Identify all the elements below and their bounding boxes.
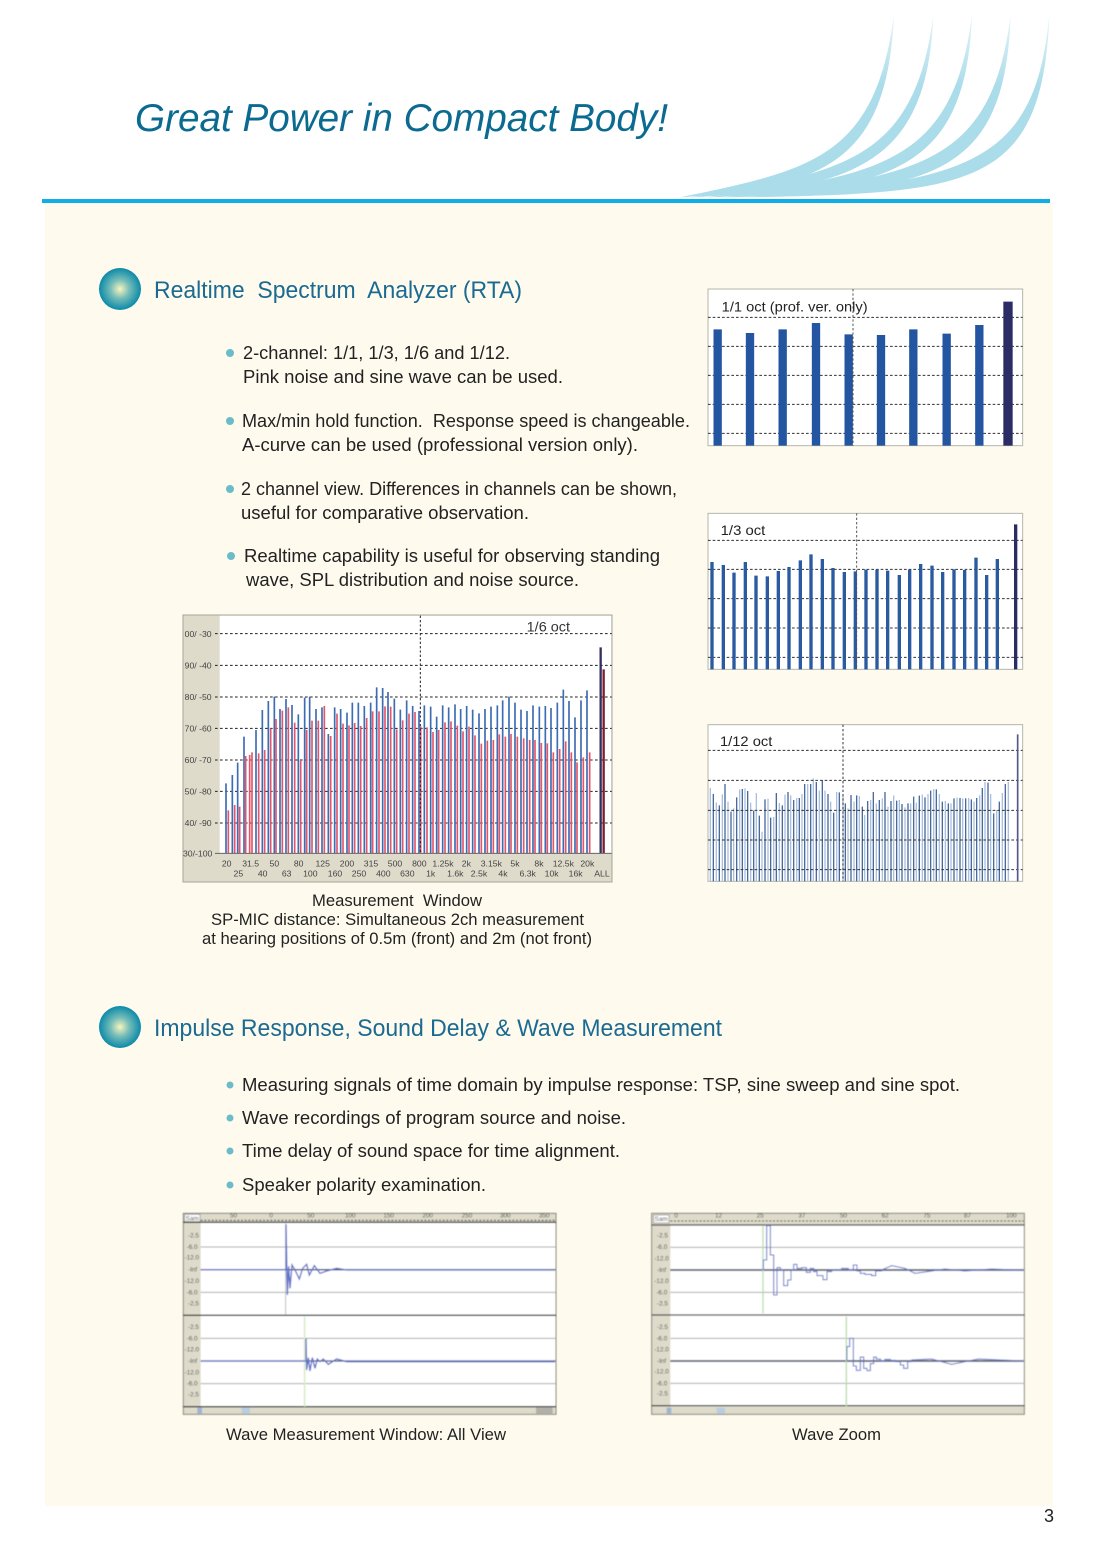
red channel bars — [228, 706, 590, 853]
wave axis labels: -6.0 — [187, 1335, 198, 1342]
x axis labels: 31.5 — [242, 859, 259, 869]
y axis labels: 30/-100 — [183, 849, 213, 859]
wave zoom axis labels: -6.0 — [656, 1380, 668, 1387]
bullet list: RTA features: Pink noise and sine wave can be used. — [243, 366, 563, 387]
x axis labels: 6.3k — [519, 869, 537, 879]
chart: 1/12 octave — [708, 725, 1023, 881]
wave axis labels: 200 — [422, 1213, 433, 1220]
section icon: impulse response — [99, 1006, 141, 1048]
wave axis labels: -6.0 — [187, 1381, 198, 1388]
wave zoom axis labels: -6.0 — [656, 1289, 668, 1296]
caption: wave measurement window: Wave Measurement Window: All View — [226, 1425, 507, 1444]
x axis labels: 25 — [234, 869, 243, 879]
wave zoom axis labels — [654, 1213, 1017, 1398]
wave axis labels: -12.0 — [185, 1278, 200, 1285]
bullet list: impulse response features: Measuring signals of time domain by impulse response: TSP, sine sweep and sine spot. — [242, 1074, 960, 1095]
bullet list: RTA features: 2 channel view. Differences in channels can be shown, — [241, 478, 677, 499]
wave zoom axis labels: -2.5 — [657, 1324, 668, 1331]
x axis labels: 250 — [352, 869, 366, 879]
wave zoom axis labels: -12.0 — [654, 1347, 669, 1354]
x axis labels: 20 — [222, 859, 232, 869]
wave axis labels: -6.0 — [187, 1289, 198, 1296]
header rule — [42, 199, 1050, 203]
wave zoom axis labels: -Inf — [657, 1267, 666, 1274]
wave axis labels: 250 — [462, 1213, 473, 1220]
wave zoom axis labels: -12.0 — [654, 1369, 669, 1376]
bullet list: RTA features: useful for comparative observation. — [241, 502, 529, 523]
x axis labels: 10k — [545, 869, 559, 879]
wave axis labels: 300 — [500, 1213, 511, 1220]
wave zoom axis labels: 50 — [840, 1213, 848, 1220]
wave zoom axis labels: 25 — [757, 1213, 764, 1220]
wave zoom axis labels: 37 — [798, 1213, 806, 1220]
wave axis labels — [185, 1213, 550, 1398]
x axis labels: 1k — [426, 869, 436, 879]
caption: wave zoom: Wave Zoom — [792, 1425, 881, 1444]
x axis labels: 8k — [534, 859, 544, 869]
bullet list: impulse response features: Time delay of sound space for time alignment. — [242, 1140, 620, 1161]
wave zoom axis labels: -2.5 — [657, 1391, 668, 1398]
heading: Realtime Spectrum Analyzer: Realtime Spectrum Analyzer (RTA) — [154, 278, 522, 304]
y axis labels: 60/ -70 — [185, 755, 212, 765]
x axis labels: 100 — [303, 869, 318, 879]
decorative header swooshes — [680, 15, 1049, 197]
caption: measurement window — [202, 891, 592, 948]
heading: impulse response: Impulse Response, Sound Delay & Wave Measurement — [154, 1016, 722, 1042]
bullet list: RTA features: wave, SPL distribution and noise source. — [245, 569, 579, 590]
chart: 1/3 octave — [708, 513, 1023, 669]
x axis labels: 16k — [569, 869, 583, 879]
x axis labels: 2k — [462, 859, 472, 869]
y axis labels: 40/ -90 — [185, 818, 212, 828]
x axis labels: 400 — [376, 869, 391, 879]
bullet list: RTA features — [226, 342, 690, 590]
x axis labels: 500 — [388, 859, 402, 869]
wave zoom axis labels: 75 — [923, 1213, 931, 1220]
wave zoom axis labels: -12.0 — [654, 1255, 669, 1262]
wave zoom axis labels: 87 — [964, 1213, 972, 1220]
wave zoom axis labels: -6.0 — [656, 1244, 668, 1251]
section icon: RTA — [99, 268, 141, 310]
x axis labels: 315 — [364, 859, 378, 869]
y axis labels: 00/ -30 — [185, 629, 212, 639]
bullet list: RTA features: Max/min hold function. Response speed is changeable. — [242, 410, 690, 431]
y axis labels: 80/ -50 — [185, 692, 212, 702]
wave zoom axis labels: -2.5 — [657, 1301, 668, 1308]
x axis labels: 1.25k — [432, 859, 454, 869]
x axis labels: 50 — [270, 859, 279, 869]
chart: measurement window 1/6 octave — [183, 615, 612, 882]
chart: 1/12 octave: 1/12 oct — [720, 733, 772, 749]
wave zoom axis labels: -2.5 — [657, 1233, 668, 1240]
wave zoom axis labels: -6.0 — [656, 1335, 668, 1342]
wave axis labels: 100 — [345, 1213, 356, 1220]
x axis labels: 63 — [282, 869, 292, 879]
wave zoom axis labels: -12.0 — [654, 1278, 669, 1285]
x axis labels: 4k — [498, 869, 508, 879]
wave zoom axis labels: -Inf — [657, 1358, 666, 1365]
x axis labels: 160 — [328, 869, 342, 879]
caption: measurement window: at hearing positions of 0.5m (front) and 2m (not front) — [202, 929, 592, 948]
wave axis labels: -2.5 — [188, 1391, 199, 1398]
wave zoom axis labels: 62 — [882, 1213, 889, 1220]
x axis labels: ALL — [594, 869, 610, 879]
wave zoom axis labels: 0 — [674, 1213, 678, 1220]
x axis labels: 125 — [315, 859, 330, 869]
x axis labels — [222, 859, 610, 879]
y axis labels: 90/ -40 — [185, 660, 212, 670]
x axis labels: 20k — [580, 859, 595, 869]
caption: measurement window: SP-MIC distance: Simultaneous 2ch measurement — [211, 910, 584, 929]
bullet list: impulse response features: Speaker polarity examination. — [242, 1174, 486, 1195]
wave axis labels: 150 — [383, 1213, 394, 1220]
x axis labels: 80 — [294, 859, 304, 869]
bullet list: impulse response features: Wave recordings of program source and noise. — [242, 1107, 626, 1128]
blue channel bars — [226, 687, 587, 853]
wave axis labels: -12.0 — [185, 1255, 200, 1262]
chart: measurement window 1/6 octave: 1/6 oct — [527, 619, 570, 635]
title: Great Power in Compact Body! — [135, 97, 668, 140]
bullet list: RTA features: A-curve can be used (professional version only). — [242, 434, 638, 455]
wave axis labels: -2.5 — [188, 1233, 199, 1240]
y axis labels: 70/ -60 — [185, 723, 212, 733]
bullet list: RTA features: 2-channel: 1/1, 1/3, 1/6 and 1/12. — [243, 342, 510, 363]
chart: 1/1 octave: 1/1 oct (prof. ver. only) — [722, 299, 868, 315]
wave axis labels: -Inf — [188, 1267, 197, 1274]
x axis labels: 5k — [510, 859, 520, 869]
x axis labels: 200 — [340, 859, 354, 869]
y axis labels — [183, 629, 213, 859]
wave axis labels: 350 — [539, 1213, 550, 1220]
wave axis labels: 50 — [230, 1213, 238, 1220]
chart: wave zoom — [652, 1213, 1024, 1414]
wave axis labels: 0 — [269, 1213, 273, 1220]
chart: wave measurement all view: Sam — [186, 1215, 199, 1222]
chart: wave zoom: Sam — [655, 1216, 668, 1223]
bullet list: impulse response features — [226, 1074, 960, 1195]
page number: 3 — [1044, 1506, 1054, 1526]
wave axis labels: -2.5 — [188, 1324, 199, 1331]
bullet list: RTA features: Realtime capability is useful for observing standing — [244, 545, 660, 566]
x axis labels: 630 — [400, 869, 415, 879]
x axis labels: 2.5k — [471, 869, 488, 879]
wave axis labels: -12.0 — [185, 1369, 200, 1376]
wave axis labels: -2.5 — [188, 1301, 199, 1308]
y axis labels: 50/ -80 — [185, 786, 212, 796]
chart: 1/1 octave — [708, 289, 1023, 446]
wave zoom axis labels: 100 — [1006, 1213, 1017, 1220]
wave axis labels: -6.0 — [187, 1244, 198, 1251]
wave axis labels: -12.0 — [185, 1347, 200, 1354]
chart: 1/3 octave: 1/3 oct — [721, 522, 765, 538]
x axis labels: 3.15k — [481, 859, 503, 869]
chart: wave measurement all view — [183, 1213, 556, 1414]
x axis labels: 800 — [412, 859, 427, 869]
wave axis labels: 50 — [307, 1213, 315, 1220]
cream content panel — [45, 203, 1053, 1506]
wave axis labels: -Inf — [188, 1358, 197, 1365]
caption: measurement window: Measurement Window — [312, 891, 483, 910]
wave zoom axis labels: 12 — [715, 1213, 723, 1220]
x axis labels: 12.5k — [553, 859, 575, 869]
x axis labels: 1.6k — [447, 869, 464, 879]
x axis labels: 40 — [258, 869, 268, 879]
